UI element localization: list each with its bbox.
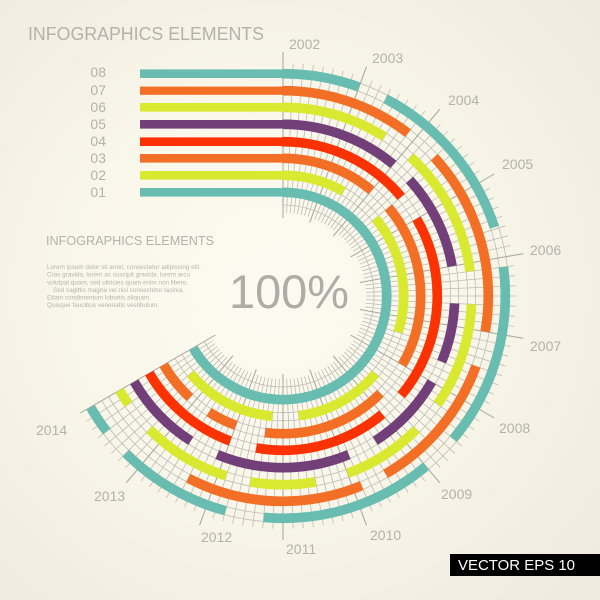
- legend numbers: 02: [90, 167, 106, 183]
- year labels: 2013: [94, 488, 125, 504]
- vector eps badge: VECTOR EPS 10: [458, 558, 575, 574]
- year labels: 2006: [530, 242, 561, 258]
- legend numbers: 05: [90, 116, 106, 132]
- legend numbers: 03: [90, 150, 106, 166]
- body text: Sed sagittis magna vel nisl consectetur lacinia.: [53, 287, 184, 294]
- series 02 lime: bar and arc: [140, 171, 404, 417]
- body text: volutpat quam, sed ultricies quam enim non libero.: [47, 279, 188, 286]
- year labels: 2007: [530, 338, 561, 354]
- title: INFOGRAPHICS ELEMENTS: [28, 24, 264, 44]
- body text: Lorem ipsum dolor sit amet, consectetur adipiscing elit.: [47, 264, 201, 271]
- year labels: 2010: [370, 527, 401, 543]
- subheading: INFOGRAPHICS ELEMENTS: [46, 233, 214, 248]
- legend numbers: [90, 64, 106, 200]
- series 05 purple: bar and arc: [111, 120, 455, 468]
- body text: Etiam condimentum lobortis aliquam.: [47, 294, 151, 301]
- radial chart grid: [57, 52, 524, 540]
- series 07 orange: bar and arc: [78, 87, 488, 501]
- year labels: [36, 36, 561, 557]
- legend numbers: 04: [90, 133, 106, 149]
- series 04 red: bar and arc: [129, 137, 437, 450]
- series 03 orange: bar and arc: [140, 154, 421, 434]
- legend numbers: 06: [90, 99, 106, 115]
- body text: [47, 264, 201, 309]
- series 06 lime: bar and arc: [94, 103, 472, 485]
- legend numbers: 01: [90, 184, 106, 200]
- year labels: 2002: [289, 36, 320, 52]
- year labels: 2011: [286, 541, 316, 557]
- year labels: 2014: [36, 422, 67, 438]
- legend numbers: 07: [90, 82, 106, 98]
- centre value: 100%: [229, 265, 349, 318]
- year labels: 2005: [502, 156, 533, 172]
- vector eps badge: [450, 554, 600, 576]
- series 01 teal: bar and arc: [140, 188, 387, 400]
- year labels: 2012: [201, 529, 232, 545]
- series 08 teal: bar and arc: [61, 69, 505, 518]
- body text: Quisque faucibus venenatis vestibulum.: [47, 302, 159, 309]
- year labels: 2009: [441, 486, 472, 502]
- year labels: 2008: [499, 420, 530, 436]
- year labels: 2003: [372, 50, 403, 66]
- legend numbers: 08: [90, 64, 106, 80]
- body text: Cras gravida, lorem ac suscipit gravida, lorem arcu: [47, 272, 190, 279]
- year labels: 2004: [448, 92, 479, 108]
